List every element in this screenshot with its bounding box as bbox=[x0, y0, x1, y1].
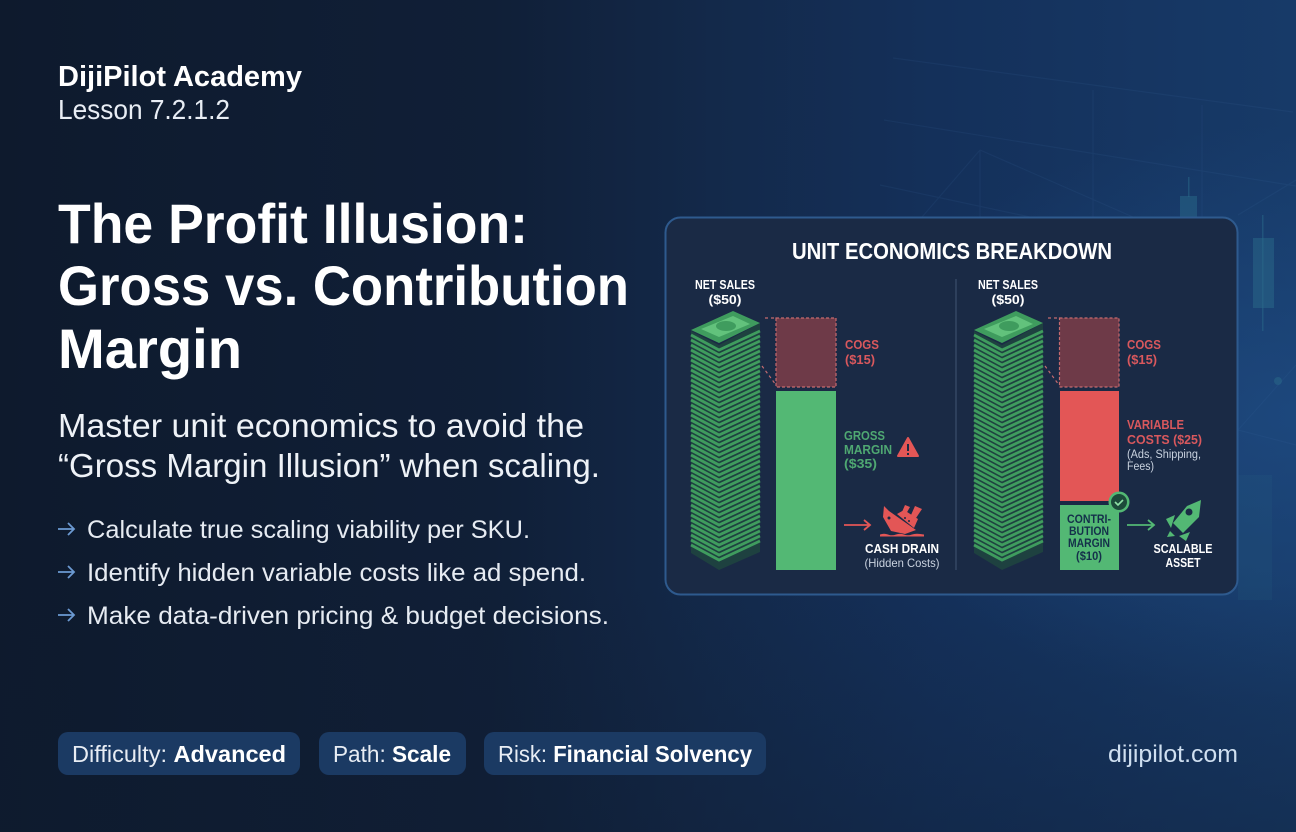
cogs label bbox=[845, 337, 879, 367]
variable costs label: Fees) bbox=[1127, 461, 1154, 473]
cash drain label: (Hidden Costs) bbox=[864, 556, 940, 570]
cogs label: ($15) bbox=[1127, 352, 1157, 367]
subtitle: “Gross Margin Illusion” when scaling. bbox=[58, 447, 600, 484]
cash stack icon bbox=[974, 311, 1043, 570]
cash drain label bbox=[864, 542, 940, 570]
bullet list bbox=[58, 516, 609, 630]
gross margin label: GROSS bbox=[844, 428, 885, 443]
cogs label: ($15) bbox=[845, 352, 875, 367]
variable costs label: VARIABLE bbox=[1127, 417, 1184, 432]
cash drain label: CASH DRAIN bbox=[865, 542, 939, 556]
tag: path: Path: Scale bbox=[333, 741, 451, 767]
icon: check badge bbox=[1108, 492, 1130, 512]
gross margin label: ($35) bbox=[844, 456, 877, 471]
bullet list: Calculate true scaling viability per SKU. bbox=[87, 516, 530, 544]
scalable asset label bbox=[1154, 542, 1212, 570]
panel: unit economics breakdown bbox=[666, 218, 1238, 594]
net sales label bbox=[695, 278, 755, 307]
tag: difficulty: Difficulty: Advanced bbox=[72, 741, 286, 767]
icon: warning bbox=[898, 438, 918, 456]
panel heading: UNIT ECONOMICS BREAKDOWN bbox=[792, 238, 1112, 264]
variable costs label bbox=[1127, 417, 1202, 473]
contribution margin label: MARGIN bbox=[1068, 538, 1110, 550]
left column: gross margin bbox=[691, 278, 940, 570]
variable costs bar bbox=[1060, 391, 1119, 501]
title: Margin bbox=[58, 317, 242, 380]
cogs label bbox=[1127, 337, 1161, 367]
tag: path bbox=[319, 732, 466, 775]
subtitle bbox=[58, 407, 600, 484]
variable costs label: (Ads, Shipping, bbox=[1127, 449, 1201, 461]
net sales label: ($50) bbox=[708, 293, 742, 307]
arrow bbox=[1127, 520, 1154, 530]
right column: contribution margin bbox=[974, 278, 1212, 570]
net sales label: NET SALES bbox=[695, 278, 755, 292]
subtitle: Master unit economics to avoid the bbox=[58, 407, 584, 444]
contribution margin label: ($10) bbox=[1076, 551, 1102, 563]
icon: rocket bbox=[1166, 500, 1201, 541]
bullet list: Make data-driven pricing & budget decisions. bbox=[87, 602, 609, 630]
tag: risk bbox=[484, 732, 766, 775]
brand header bbox=[58, 61, 302, 125]
website: dijipilot.com bbox=[1108, 741, 1238, 768]
bullet list: Identify hidden variable costs like ad spend. bbox=[87, 559, 586, 587]
title: The Profit Illusion: bbox=[58, 192, 528, 255]
contribution margin label: BUTION bbox=[1069, 526, 1109, 538]
tag: difficulty bbox=[58, 732, 300, 775]
contribution margin label: CONTRI- bbox=[1067, 514, 1111, 526]
cogs bar bbox=[776, 318, 836, 387]
icon: sinking ship bbox=[880, 505, 924, 536]
title: Gross vs. Contribution bbox=[58, 254, 629, 317]
contribution margin label bbox=[1067, 514, 1111, 563]
scalable asset label: SCALABLE bbox=[1154, 542, 1212, 556]
title bbox=[58, 192, 629, 380]
gross margin label bbox=[844, 428, 892, 471]
gross margin label: MARGIN bbox=[844, 442, 892, 457]
net sales label: ($50) bbox=[992, 293, 1024, 307]
cogs bar bbox=[1060, 318, 1119, 387]
brand header: Lesson 7.2.1.2 bbox=[58, 94, 230, 125]
tag: risk: Risk: Financial Solvency bbox=[498, 741, 752, 767]
cogs label: COGS bbox=[1127, 337, 1161, 352]
gross margin bar bbox=[776, 391, 836, 570]
cogs label: COGS bbox=[845, 337, 879, 352]
net sales label bbox=[978, 278, 1038, 307]
contribution margin bar bbox=[1060, 505, 1119, 570]
variable costs label: COSTS ($25) bbox=[1127, 432, 1202, 447]
scalable asset label: ASSET bbox=[1166, 556, 1201, 570]
cash stack icon bbox=[691, 311, 760, 570]
brand header: DijiPilot Academy bbox=[58, 61, 302, 93]
net sales label: NET SALES bbox=[978, 278, 1038, 292]
arrow bbox=[844, 520, 870, 530]
